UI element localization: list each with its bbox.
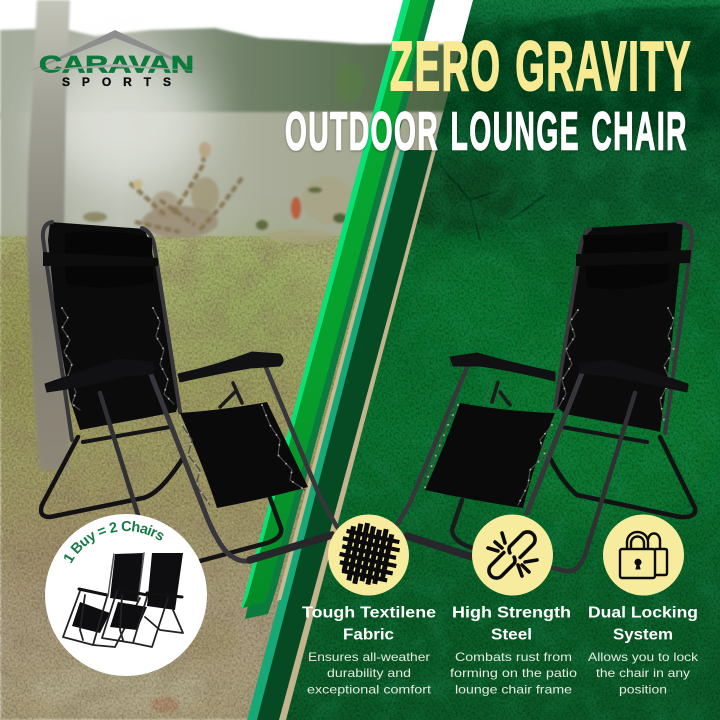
stripe: dark green edge — [245, 0, 435, 619]
inner leg — [452, 500, 473, 548]
rear base frame — [41, 437, 183, 517]
inner leg — [200, 498, 281, 561]
back lacing — [62, 308, 174, 410]
seat fabric — [425, 403, 555, 508]
heading: High Strength — [452, 605, 571, 622]
icon: broken chain link — [472, 514, 553, 596]
seat fabric — [180, 402, 308, 508]
description — [588, 650, 699, 697]
left chair — [41, 222, 337, 561]
front armrest — [45, 359, 154, 392]
stripe: bright green band — [243, 0, 428, 608]
front tube — [527, 373, 582, 513]
right chair — [397, 222, 695, 571]
rear armrest — [178, 352, 283, 382]
rear arm support — [492, 382, 510, 405]
back frame — [555, 222, 692, 433]
heading: Steel — [491, 626, 532, 643]
heading — [588, 605, 698, 643]
feature: high strength steel — [450, 514, 577, 697]
back lacing — [558, 308, 674, 420]
logo: caravan sports — [28, 30, 204, 89]
seat lacing — [182, 405, 305, 505]
logo underline — [29, 64, 202, 71]
rear base frame — [550, 437, 695, 517]
back fabric — [48, 222, 178, 430]
heading: Fabric — [343, 626, 394, 643]
strap — [576, 250, 691, 266]
description: lounge chair frame — [455, 683, 572, 697]
seat lacing — [425, 405, 552, 505]
headrest — [583, 232, 669, 289]
bottom bar — [407, 536, 472, 557]
description: Ensures all-weather — [308, 650, 430, 664]
logo roof — [28, 30, 204, 72]
feature: tough textilene fabric — [302, 514, 436, 697]
curved badge text: 1 Buy = 2 Chairs — [64, 520, 164, 564]
stripe: tan line left — [277, 150, 399, 600]
icon: two padlocks — [603, 514, 684, 596]
front tube — [150, 372, 250, 561]
heading: System — [613, 626, 673, 643]
stripe: mint edge — [241, 0, 410, 608]
description — [450, 650, 577, 697]
diagonal accent stripes — [241, 0, 436, 720]
front leg — [553, 393, 635, 571]
rear armrest — [450, 353, 555, 381]
crossbar — [83, 427, 170, 442]
stripe: teal line — [247, 150, 405, 720]
stripe: tan line right — [279, 150, 436, 720]
mini chair rear — [145, 553, 183, 633]
logo sports: SPORTS — [62, 75, 171, 89]
headrest — [65, 231, 153, 288]
rear arm support — [220, 383, 242, 407]
description: Allows you to lock — [588, 650, 699, 664]
description: forming on the patio — [450, 666, 577, 680]
badge circle — [45, 514, 207, 676]
heading — [452, 605, 571, 643]
front armrest — [578, 360, 688, 392]
heading — [302, 605, 436, 643]
bottom bar — [250, 535, 332, 560]
panel: green right side of photo — [286, 0, 720, 720]
description — [307, 650, 432, 697]
strap — [43, 252, 158, 266]
heading: Dual Locking — [588, 605, 698, 622]
description: durability and — [327, 666, 411, 680]
description: Combats rust from — [455, 650, 572, 664]
feature: dual locking system — [588, 514, 699, 697]
mini chair 2 — [102, 589, 168, 647]
title — [285, 27, 692, 162]
description: exceptional comfort — [307, 683, 432, 697]
description: position — [619, 683, 667, 697]
heading: Tough Textilene — [302, 605, 436, 622]
back frame — [43, 222, 180, 440]
description: the chair in any — [596, 666, 690, 680]
mini chair 1 — [63, 553, 144, 647]
crossbar — [562, 427, 647, 442]
logo wordmark: CARAVAN — [39, 52, 194, 78]
front leg — [100, 393, 138, 515]
bushes — [83, 142, 354, 243]
stripe: dark green lower band — [250, 150, 432, 720]
rear tube — [397, 365, 468, 525]
badge: 1 buy = 2 chairs — [45, 514, 207, 676]
two mini chairs — [63, 553, 183, 647]
icon: woven fabric — [328, 514, 409, 596]
tree trunk — [27, 0, 70, 470]
back fabric — [555, 222, 683, 432]
rear tube — [265, 365, 337, 527]
